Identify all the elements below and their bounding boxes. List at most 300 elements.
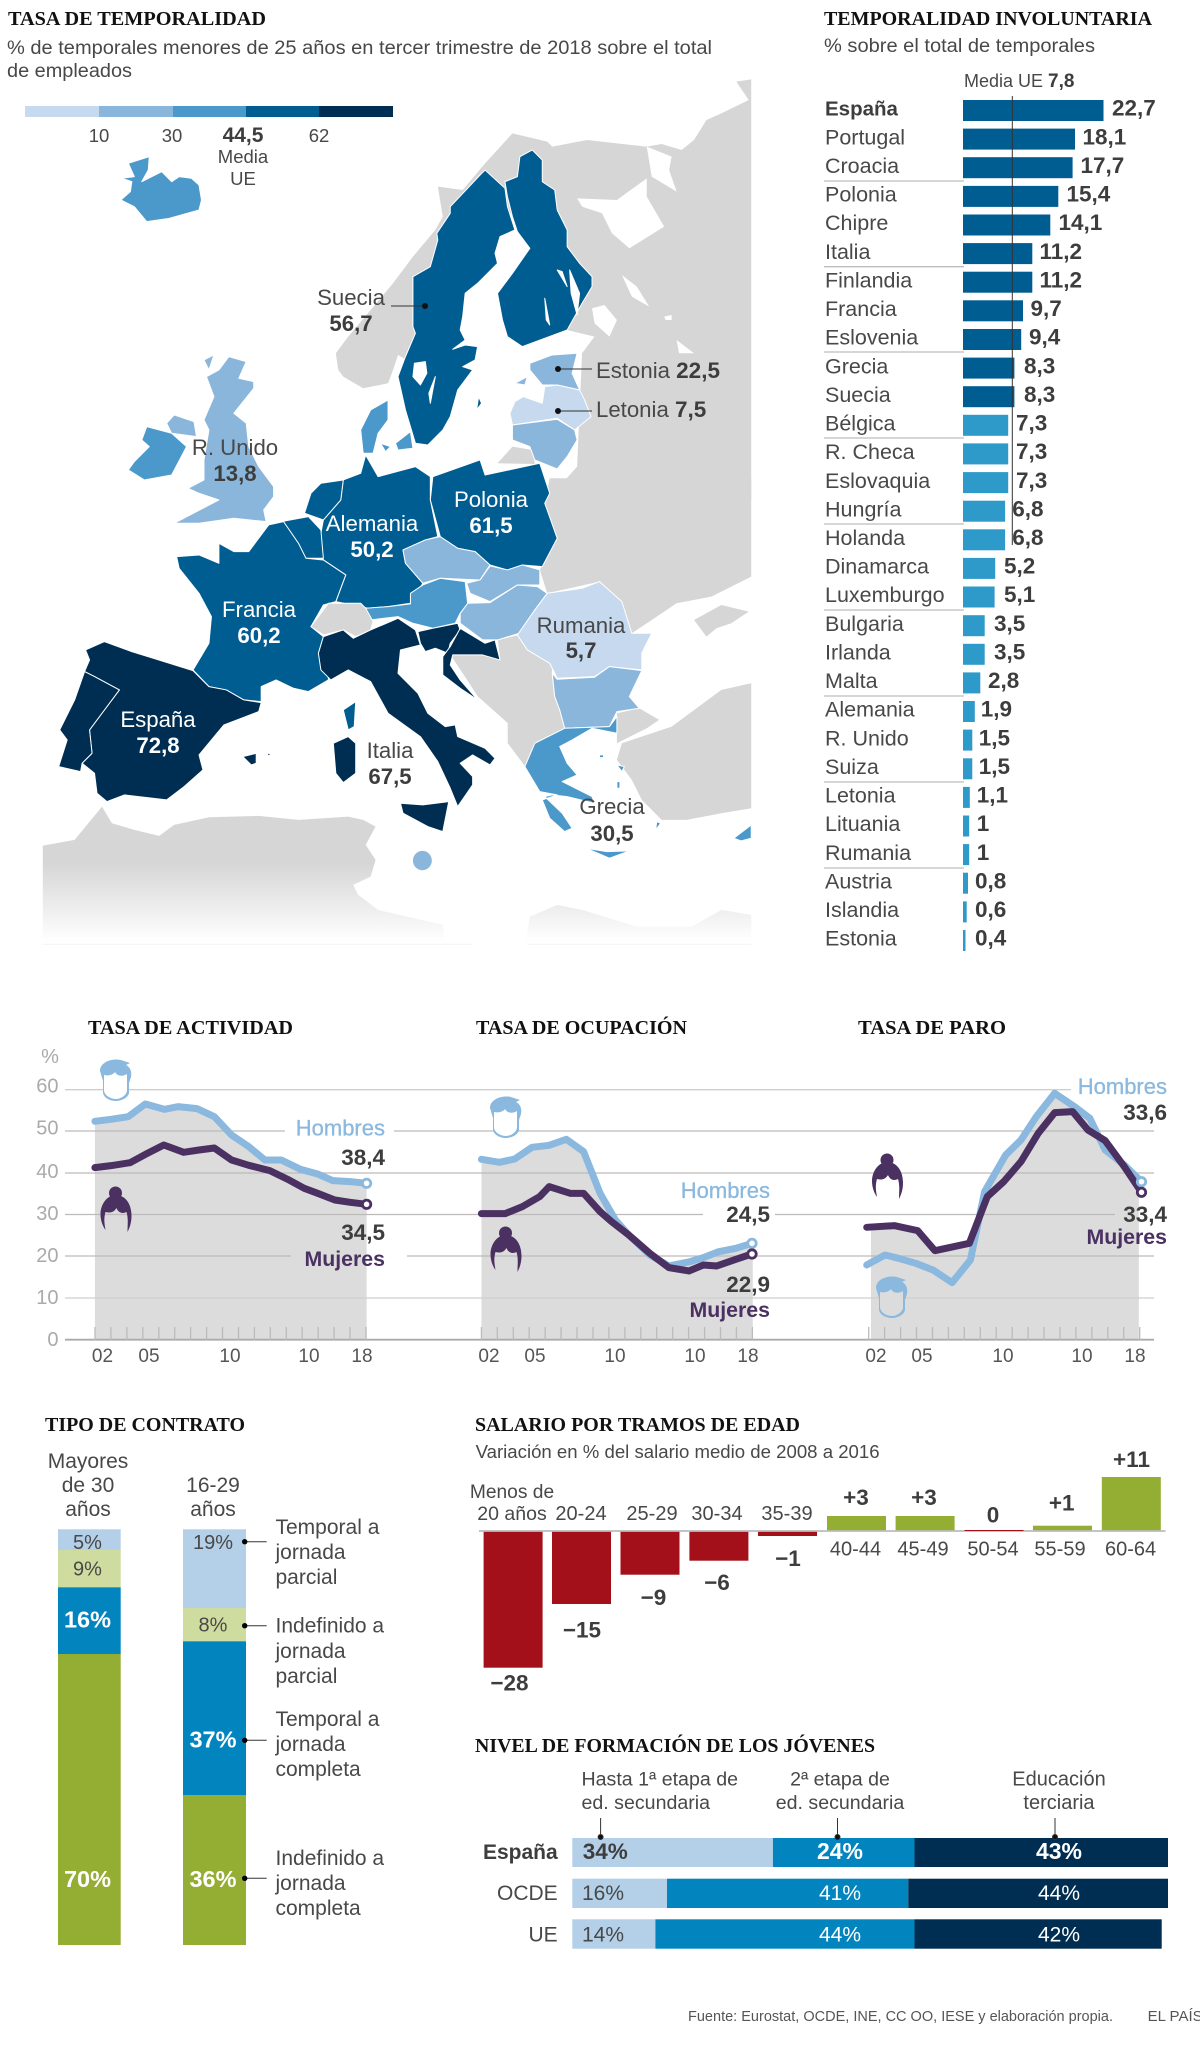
Gotland bbox=[477, 397, 482, 410]
label: Polonia bbox=[454, 487, 529, 538]
row: OCDE: OCDE bbox=[497, 1882, 558, 1905]
legend: colour scale: 44,5 bbox=[223, 124, 264, 147]
row: OCDE: 16% bbox=[582, 1882, 624, 1905]
labels: ocupación: 22,9 bbox=[726, 1272, 770, 1297]
column heading: educación terciaria bbox=[1012, 1769, 1106, 1814]
legend: colour scale: 30 bbox=[162, 125, 182, 146]
x axis labels: 05 bbox=[138, 1346, 160, 1367]
column heading: mayores de 30 años: de 30 bbox=[62, 1474, 114, 1497]
bar values: 0,4 bbox=[975, 926, 1007, 951]
bar values: −9 bbox=[641, 1585, 666, 1610]
label: Alemania: 50,2 bbox=[350, 537, 394, 562]
Bulgaria bbox=[552, 667, 642, 728]
country names: Islandia bbox=[825, 898, 899, 922]
panel: tasa de temporalidad bbox=[7, 8, 751, 945]
y axis grid bbox=[65, 1090, 1154, 1340]
labels: actividad: Hombres bbox=[296, 1116, 385, 1141]
land: Ukraine and Belarus bbox=[540, 478, 751, 633]
country names: Eslovaquia bbox=[825, 469, 930, 493]
x axis labels: 10 bbox=[1071, 1346, 1093, 1367]
column heading: educación terciaria: Educación bbox=[1012, 1769, 1106, 1791]
bar values: 18,1 bbox=[1082, 124, 1126, 149]
Corsica bbox=[343, 702, 356, 730]
label: Rumania: Rumania bbox=[537, 613, 626, 638]
bar values: 22,7 bbox=[1112, 96, 1156, 121]
land: Kaliningrad bbox=[498, 447, 535, 464]
x axis labels: 02 bbox=[865, 1346, 887, 1367]
country names: Bulgaria bbox=[825, 612, 904, 636]
country names: Finlandia bbox=[825, 268, 912, 292]
stacked bar: 16-29 bbox=[183, 1529, 246, 1945]
line: hombres paro bbox=[867, 1093, 1142, 1283]
label: Grecia bbox=[579, 794, 645, 846]
label: Alemania bbox=[326, 511, 419, 562]
label: Estonia: Estonia 22,5 bbox=[596, 358, 720, 383]
Denmark bbox=[361, 400, 388, 453]
country names: Rumania bbox=[825, 841, 911, 865]
row: UE bbox=[529, 1919, 1162, 1949]
age group labels: 50-54 bbox=[967, 1539, 1019, 1561]
label: Letonia: Letonia 7,5 bbox=[596, 397, 706, 422]
x axis labels: 02 bbox=[478, 1346, 500, 1367]
Greek islands bbox=[599, 755, 661, 830]
land: North Africa bbox=[43, 807, 445, 944]
row: España: 24% bbox=[817, 1838, 863, 1864]
legend: colour scale: 62 bbox=[309, 125, 329, 146]
label: Italia bbox=[367, 738, 414, 789]
line: hombres ocupación bbox=[481, 1139, 752, 1266]
row: UE: 44% bbox=[819, 1924, 861, 1947]
Poland bbox=[430, 460, 557, 570]
Northern Ireland bbox=[167, 415, 197, 437]
Malta bbox=[413, 851, 432, 870]
Danish islands bbox=[381, 432, 413, 452]
Iceland bbox=[121, 157, 201, 222]
Finland bbox=[498, 150, 592, 347]
country names: Austria bbox=[825, 869, 892, 893]
bar values: 6,8 bbox=[1012, 525, 1044, 550]
Crete bbox=[586, 848, 629, 858]
age group labels: 55-59 bbox=[1034, 1539, 1086, 1561]
legend: temporal a jornada parcial: parcial bbox=[276, 1566, 337, 1589]
bar chart: temporalidad por país bbox=[963, 100, 1104, 951]
bar values: −1 bbox=[775, 1546, 801, 1571]
icon: woman, paro bbox=[872, 1154, 903, 1199]
row: España: 43% bbox=[1036, 1838, 1082, 1864]
y axis labels: 0 bbox=[47, 1329, 58, 1351]
y axis labels: 30 bbox=[36, 1203, 58, 1225]
France bbox=[177, 522, 346, 702]
label: Grecia: Grecia bbox=[579, 794, 645, 819]
bar values: −28 bbox=[490, 1671, 529, 1696]
title: tasa de actividad: TASA DE ACTIVIDAD bbox=[88, 1017, 293, 1039]
title: nivel de formación: NIVEL DE FORMACIÓN DE LOS JÓVENES bbox=[475, 1733, 875, 1757]
legend: temporal a jornada parcial: Temporal a bbox=[276, 1516, 380, 1539]
bar values: 0,8 bbox=[975, 868, 1006, 893]
row: España: 34% bbox=[583, 1839, 628, 1864]
bar values: 1,9 bbox=[981, 697, 1012, 722]
labels: actividad bbox=[296, 1116, 385, 1271]
line: hombres actividad bbox=[95, 1104, 367, 1183]
icon: woman, ocupación bbox=[490, 1226, 522, 1272]
legend: indefinido a jornada completa: Indefinido a bbox=[276, 1847, 384, 1870]
labels: paro: Mujeres bbox=[1086, 1225, 1167, 1249]
country names: Alemania bbox=[825, 698, 915, 722]
stacked bar: mayores de 30: 16% bbox=[64, 1607, 111, 1633]
legend: temporal a jornada completa: jornada bbox=[274, 1733, 346, 1756]
land: Turkey bbox=[617, 683, 751, 820]
stacked bar: 16-29: 36% bbox=[189, 1866, 237, 1892]
bar values: 9,7 bbox=[1030, 296, 1062, 321]
column heading: 16-29 años: años bbox=[190, 1498, 236, 1521]
subtitle: sobre el total de temporales: % sobre el total de temporales bbox=[824, 36, 1095, 57]
legend: indefinido a jornada parcial bbox=[242, 1615, 384, 1688]
Scottish isles bbox=[204, 355, 214, 370]
map of Europe bbox=[43, 79, 751, 945]
gray area: paro bbox=[871, 1093, 1139, 1340]
bar values: 8,3 bbox=[1024, 353, 1055, 378]
panel: nivel de formación bbox=[475, 1733, 1168, 1949]
x axis labels: 02 bbox=[92, 1346, 113, 1367]
bar values: 17,7 bbox=[1080, 153, 1124, 178]
country names: Suecia bbox=[825, 383, 891, 407]
country names: Suiza bbox=[825, 755, 879, 779]
panel: temporalidad involuntaria bbox=[824, 8, 1156, 951]
Netherlands bbox=[304, 480, 343, 520]
x axis labels: 10 bbox=[298, 1346, 320, 1367]
label: R. Unido: R. Unido bbox=[192, 435, 278, 460]
Germany bbox=[318, 455, 438, 608]
bar values: 1 bbox=[977, 811, 989, 836]
bar values: 7,3 bbox=[1016, 410, 1047, 436]
x axis labels: 10 bbox=[219, 1346, 241, 1367]
labels: paro: 33,6 bbox=[1123, 1100, 1167, 1125]
labels: paro: Hombres bbox=[1078, 1074, 1167, 1099]
bar values: 0,6 bbox=[975, 897, 1006, 922]
country names: Bélgica bbox=[825, 412, 896, 436]
x axis labels: 18 bbox=[1124, 1346, 1146, 1367]
column heading: hasta 1ª etapa: Hasta 1ª etapa de bbox=[582, 1769, 738, 1791]
country names: R. Checa bbox=[825, 440, 915, 464]
age group labels bbox=[470, 1482, 1156, 1561]
icon: woman, actividad bbox=[100, 1186, 132, 1232]
legend: colour scale bbox=[25, 106, 393, 189]
Crimea bbox=[694, 605, 749, 637]
labels: ocupación bbox=[681, 1178, 770, 1322]
Balearic Islands bbox=[243, 753, 271, 765]
bar values bbox=[975, 96, 1156, 951]
y axis labels bbox=[36, 1046, 59, 1351]
label: Alemania: Alemania bbox=[326, 511, 419, 536]
label: R. Unido bbox=[192, 435, 278, 486]
country names: Grecia bbox=[825, 354, 888, 378]
icon: man, paro bbox=[876, 1276, 907, 1318]
bar values: 11,2 bbox=[1040, 239, 1082, 264]
Czech Republic bbox=[403, 537, 490, 583]
country names: Luxemburgo bbox=[825, 583, 945, 607]
bar values: 6,8 bbox=[1012, 496, 1044, 521]
label: Suecia bbox=[317, 285, 428, 336]
Sardinia bbox=[333, 737, 356, 783]
row: OCDE: 44% bbox=[1038, 1882, 1080, 1905]
x axis labels: 05 bbox=[911, 1346, 933, 1367]
bar values: 11,2 bbox=[1040, 267, 1082, 292]
column heading: mayores de 30 años bbox=[48, 1450, 128, 1521]
country names bbox=[825, 98, 945, 951]
title: salario: SALARIO POR TRAMOS DE EDAD bbox=[475, 1414, 800, 1436]
labels: actividad: 34,5 bbox=[341, 1220, 385, 1245]
stacked bar: mayores de 30 bbox=[58, 1529, 121, 1945]
country names: Croacia bbox=[825, 154, 899, 178]
legend: indefinido a jornada parcial: jornada bbox=[274, 1640, 346, 1663]
map labels bbox=[120, 285, 720, 846]
Switzerland bbox=[311, 603, 373, 637]
column heading: 2ª etapa bbox=[776, 1769, 904, 1814]
column heading: hasta 1ª etapa bbox=[582, 1769, 738, 1814]
title: tasa de paro: TASA DE PARO bbox=[858, 1017, 1006, 1039]
legend: colour scale: Media bbox=[218, 146, 269, 167]
bar values: 5,2 bbox=[1004, 554, 1035, 579]
bar values: 1 bbox=[977, 840, 989, 865]
legend: colour scale: 10 bbox=[89, 125, 109, 146]
bar values: +3 bbox=[911, 1485, 937, 1510]
Croatia bbox=[443, 628, 500, 700]
country names: Holanda bbox=[825, 526, 905, 550]
country names: Chipre bbox=[825, 211, 888, 235]
gray area: actividad bbox=[95, 1104, 367, 1340]
labels: ocupación: Mujeres bbox=[690, 1298, 770, 1322]
Romania bbox=[517, 582, 652, 678]
subtitle: salario: Variación en % del salario medio de 2008 a 2016 bbox=[476, 1441, 880, 1462]
bar values: 8,3 bbox=[1024, 382, 1055, 407]
label: Polonia: 61,5 bbox=[469, 513, 513, 538]
small lakes bbox=[664, 118, 694, 353]
y axis labels: 60 bbox=[36, 1076, 58, 1098]
y axis labels: % bbox=[41, 1046, 59, 1068]
line: mujeres actividad bbox=[95, 1145, 367, 1204]
x axis labels: 18 bbox=[737, 1346, 759, 1367]
label: media UE: Media UE 7,8 bbox=[964, 71, 1074, 92]
Scotland and England bbox=[174, 357, 274, 523]
sea and lakes in the north-east bbox=[577, 147, 677, 337]
bar values: +11 bbox=[1113, 1447, 1150, 1472]
country names: R. Unido bbox=[825, 726, 909, 750]
title: temporalidad involuntaria: TEMPORALIDAD INVOLUNTARIA bbox=[824, 8, 1153, 30]
Spain bbox=[82, 642, 261, 802]
land: Middle East bbox=[525, 905, 751, 944]
Hungary bbox=[460, 585, 547, 640]
legend: indefinido a jornada parcial: Indefinido a bbox=[276, 1615, 384, 1638]
x axis labels: 05 bbox=[524, 1346, 546, 1367]
stacked bar: 16-29: 37% bbox=[189, 1727, 237, 1753]
bar chart: salario bbox=[479, 1477, 1166, 1668]
legend: temporal a jornada parcial bbox=[242, 1516, 380, 1589]
Greece bbox=[525, 717, 617, 832]
Sweden bbox=[398, 170, 515, 445]
Estonian island bbox=[515, 377, 527, 385]
legend: indefinido a jornada parcial: parcial bbox=[276, 1665, 337, 1688]
bar values: 2,8 bbox=[988, 668, 1019, 693]
legend: indefinido a jornada completa: jornada bbox=[274, 1872, 346, 1895]
column heading: educación terciaria: terciaria bbox=[1023, 1792, 1095, 1814]
stacked bar: 16-29: 8% bbox=[199, 1615, 228, 1637]
bar values: 1,5 bbox=[979, 754, 1010, 779]
labels: ocupación: 24,5 bbox=[726, 1202, 770, 1227]
leader pointers bbox=[598, 1818, 1058, 1840]
labels: actividad: Mujeres bbox=[304, 1247, 385, 1271]
country names: España bbox=[825, 98, 899, 121]
row separators bbox=[824, 181, 964, 868]
bar values: 14,1 bbox=[1058, 210, 1102, 235]
age group labels: 30-34 bbox=[691, 1503, 743, 1525]
gray area: ocupación bbox=[481, 1139, 753, 1340]
legend: temporal a jornada parcial: jornada bbox=[274, 1541, 346, 1564]
country names: Dinamarca bbox=[825, 555, 929, 579]
Belgium bbox=[281, 517, 323, 558]
land: Balkans bbox=[450, 635, 565, 767]
age group labels: 40-44 bbox=[830, 1539, 881, 1561]
lakes of Finland and Sweden bbox=[413, 270, 580, 403]
y axis labels: 40 bbox=[36, 1161, 58, 1183]
row: OCDE: 41% bbox=[819, 1882, 861, 1905]
age group labels: 60-64 bbox=[1105, 1539, 1156, 1561]
country names: Italia bbox=[825, 240, 870, 264]
icon: man, ocupación bbox=[490, 1096, 521, 1138]
country names: Lituania bbox=[825, 812, 900, 836]
age group labels: Menos de bbox=[470, 1482, 554, 1503]
labels: actividad: 38,4 bbox=[341, 1145, 385, 1170]
country names: Hungría bbox=[825, 497, 902, 521]
bar values: +1 bbox=[1049, 1491, 1075, 1516]
country names: Letonia bbox=[825, 784, 896, 808]
bar values: 3,5 bbox=[994, 640, 1025, 664]
bar values bbox=[490, 1447, 1150, 1696]
Lithuania bbox=[512, 419, 577, 469]
y axis labels: 20 bbox=[36, 1245, 58, 1267]
age group labels: 20-24 bbox=[555, 1503, 607, 1525]
label: Rumania: 5,7 bbox=[566, 638, 596, 663]
panel: tipo de contrato bbox=[45, 1414, 384, 1945]
column heading: 2ª etapa: ed. secundaria bbox=[776, 1792, 904, 1814]
label: Francia: Francia bbox=[222, 597, 297, 622]
y axis labels: 50 bbox=[36, 1118, 58, 1140]
column heading: mayores de 30 años: años bbox=[65, 1498, 111, 1521]
label: Rumania bbox=[537, 613, 626, 663]
Sicily bbox=[400, 802, 449, 832]
country names: Irlanda bbox=[825, 640, 891, 664]
panel: salario por tramos de edad bbox=[470, 1414, 1166, 1696]
bar values: 1,5 bbox=[979, 725, 1010, 750]
subtitle second line: de empleados bbox=[7, 61, 132, 82]
line: mujeres paro bbox=[867, 1112, 1142, 1251]
Slovenia bbox=[418, 623, 460, 653]
labels: ocupación: Hombres bbox=[681, 1178, 770, 1203]
stacked bar: mayores de 30: 5% bbox=[73, 1532, 102, 1554]
bar values: −15 bbox=[563, 1618, 601, 1643]
label: Grecia: 30,5 bbox=[590, 821, 634, 846]
row: OCDE bbox=[497, 1879, 1168, 1908]
row: UE: UE bbox=[529, 1924, 558, 1947]
label: Suecia: 56,7 bbox=[329, 311, 373, 336]
legend: temporal a jornada completa: completa bbox=[276, 1758, 361, 1781]
bar values: 5,1 bbox=[1004, 582, 1035, 607]
icon: man, actividad bbox=[100, 1059, 131, 1101]
stacked bar: 16-29: 19% bbox=[193, 1532, 233, 1554]
row: España: España bbox=[483, 1841, 558, 1864]
label: Polonia: Polonia bbox=[454, 487, 529, 512]
title: tasa de ocupación: TASA DE OCUPACIÓN bbox=[476, 1015, 688, 1039]
legend: indefinido a jornada completa: completa bbox=[276, 1897, 361, 1920]
stacked bar: mayores de 30: 9% bbox=[73, 1559, 102, 1581]
country names: Polonia bbox=[825, 183, 897, 207]
column heading: 16-29 años bbox=[186, 1474, 240, 1521]
footer: source: Fuente: Eurostat, OCDE, INE, CC OO, IESE y elaboración propia. bbox=[688, 2008, 1113, 2025]
bar values: 9,4 bbox=[1029, 325, 1061, 350]
y axis labels: 10 bbox=[36, 1287, 58, 1309]
x axis labels bbox=[92, 1346, 1146, 1367]
country names: Portugal bbox=[825, 125, 905, 149]
label: España bbox=[120, 707, 196, 758]
column heading: 2ª etapa: 2ª etapa de bbox=[790, 1769, 890, 1791]
label: Francia: 60,2 bbox=[237, 623, 281, 648]
x axis labels: 18 bbox=[351, 1346, 373, 1367]
label: Francia bbox=[222, 597, 297, 648]
country names: Francia bbox=[825, 297, 897, 321]
line: mujeres ocupación bbox=[481, 1187, 752, 1271]
bar values: 1,1 bbox=[977, 783, 1008, 808]
age group labels: 35-39 bbox=[761, 1503, 813, 1525]
Estonia bbox=[530, 353, 580, 390]
bar values: 3,5 bbox=[994, 611, 1025, 636]
x axis labels: 10 bbox=[604, 1346, 626, 1367]
country names: Eslovenia bbox=[825, 326, 918, 350]
row: UE: 42% bbox=[1038, 1924, 1080, 1947]
row: España bbox=[483, 1838, 1168, 1867]
column heading: hasta 1ª etapa: ed. secundaria bbox=[582, 1792, 710, 1814]
age group labels: 20 años bbox=[477, 1503, 547, 1525]
labels: paro: 33,4 bbox=[1123, 1202, 1167, 1227]
Austria bbox=[366, 578, 468, 628]
line end markers bbox=[362, 1178, 1146, 1258]
label: Italia: Italia bbox=[367, 738, 414, 763]
bar values: 0 bbox=[987, 1503, 999, 1528]
title: tipo de contrato: TIPO DE CONTRATO bbox=[45, 1414, 245, 1436]
labels: paro bbox=[1078, 1074, 1167, 1249]
land: European Turkey bbox=[617, 708, 659, 743]
legend: colour scale: UE bbox=[230, 168, 256, 189]
label: Italia: 67,5 bbox=[368, 764, 412, 789]
label: Suecia: Suecia bbox=[317, 285, 386, 310]
Portugal bbox=[59, 672, 119, 772]
country names: Malta bbox=[825, 669, 878, 693]
title: tasa de temporalidad: TASA DE TEMPORALIDAD bbox=[8, 8, 266, 30]
Slovakia bbox=[467, 565, 540, 602]
bar values: 15,4 bbox=[1066, 182, 1111, 207]
bar values: +3 bbox=[843, 1485, 869, 1510]
row: UE: 14% bbox=[582, 1924, 624, 1947]
bar values: 7,3 bbox=[1016, 468, 1047, 493]
legend: temporal a jornada completa: Temporal a bbox=[276, 1708, 380, 1731]
age group labels: 25-29 bbox=[626, 1503, 678, 1525]
column heading: 16-29 años: 16-29 bbox=[186, 1474, 240, 1497]
bar values: 7,3 bbox=[1016, 439, 1047, 464]
column heading: mayores de 30 años: Mayores bbox=[48, 1450, 128, 1473]
Cyprus bbox=[734, 825, 751, 841]
legend: indefinido a jornada completa bbox=[242, 1847, 384, 1920]
x axis labels: 10 bbox=[684, 1346, 706, 1367]
Ireland bbox=[128, 427, 187, 480]
Italy bbox=[318, 618, 495, 807]
